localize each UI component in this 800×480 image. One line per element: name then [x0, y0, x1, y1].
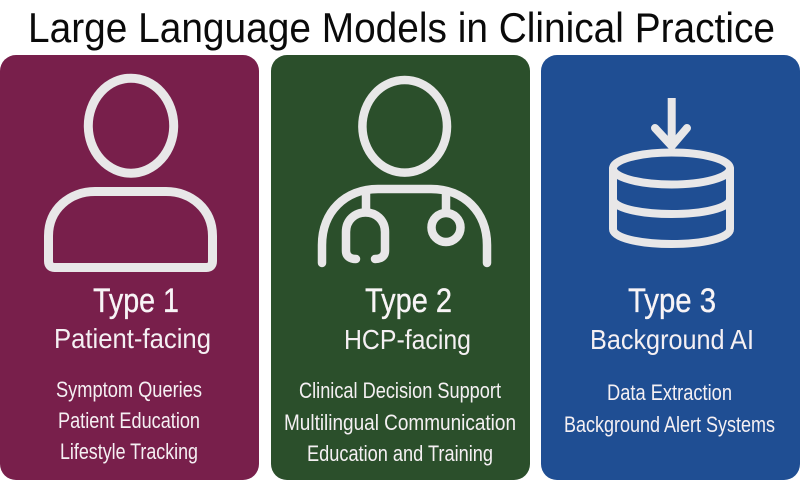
icon: patient [48, 78, 212, 268]
list: clinician uses: Multilingual Communication [284, 410, 516, 435]
list: patient uses [56, 377, 202, 464]
list: patient uses: Symptom Queries [56, 377, 202, 402]
list: background uses [564, 380, 775, 437]
panel: type 1 patient-facing [0, 55, 259, 480]
list: patient uses: Patient Education [58, 408, 200, 433]
heading: type 3: Type 3 [628, 282, 716, 320]
heading: type 1: Type 1 [93, 282, 179, 320]
icon: clinician with stethoscope [322, 80, 487, 263]
subheading: patient-facing: Patient-facing [54, 323, 211, 354]
panel: type 2 hcp-facing [271, 55, 530, 480]
heading: type 2: Type 2 [365, 282, 452, 320]
list: patient uses: Lifestyle Tracking [60, 439, 198, 464]
list: clinician uses: Clinical Decision Support [299, 378, 501, 403]
subheading: background ai: Background AI [590, 324, 754, 355]
panel: type 3 background ai [541, 55, 800, 480]
list: clinician uses: Education and Training [307, 441, 493, 466]
subheading: hcp-facing: HCP-facing [344, 324, 471, 355]
icon: arrow into database [613, 98, 730, 244]
list: clinician uses [284, 378, 516, 466]
list: background uses: Data Extraction [607, 380, 732, 405]
